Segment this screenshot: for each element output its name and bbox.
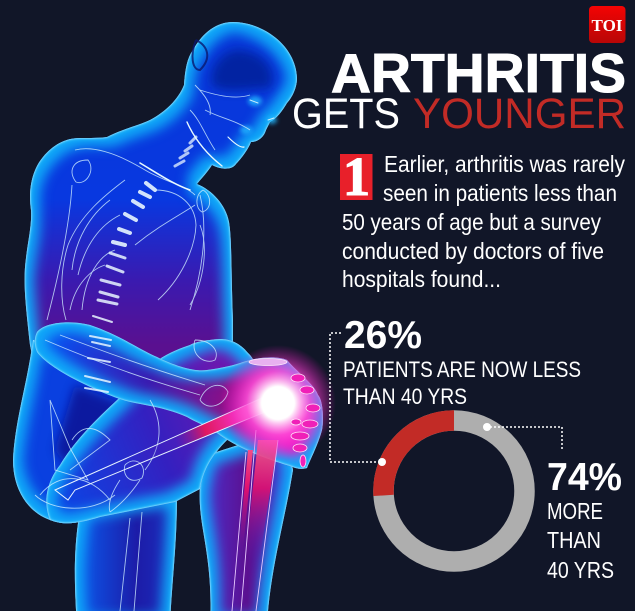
- head shading: [212, 50, 272, 90]
- thigh bone: [55, 398, 265, 500]
- head and torso: [25, 22, 297, 395]
- intro text: hospitals found...: [342, 266, 501, 292]
- donut chart: [383, 420, 524, 562]
- spine: [85, 137, 196, 392]
- title: ARTHRITIS: [331, 42, 626, 104]
- label: 74 percent: MORE: [547, 498, 603, 524]
- jaw and face rim: [140, 100, 274, 190]
- title: GETS: [292, 90, 400, 138]
- number badge: 1: [343, 146, 370, 207]
- knee pain glow: [220, 345, 336, 461]
- label: 26 percent: 26%: [344, 314, 422, 357]
- raised thigh: [46, 339, 262, 523]
- hip: [13, 340, 150, 523]
- shin bones: [232, 430, 278, 611]
- intro text: [342, 151, 625, 292]
- face highlights: [240, 96, 277, 134]
- title: YOUNGER: [413, 90, 626, 138]
- connector: 26 percent: [330, 333, 386, 466]
- TOI logo: TOI: [592, 16, 623, 35]
- connector: 74 percent: [483, 423, 562, 449]
- title: [292, 42, 626, 138]
- TOI logo: [589, 6, 626, 43]
- label: 74 percent: [547, 456, 622, 583]
- fingers: [249, 358, 320, 467]
- label: 74 percent: 74%: [547, 456, 622, 499]
- label: 74 percent: 40 YRS: [547, 557, 614, 583]
- standing leg: [75, 495, 177, 611]
- label: 26 percent: PATIENTS ARE NOW LESS: [343, 357, 581, 382]
- intro text: 50 years of age but a survey: [342, 209, 601, 235]
- label: 26 percent: THAN 40 YRS: [343, 384, 467, 409]
- illustration: human body with glowing knee: [13, 22, 336, 611]
- lower bent leg: [200, 430, 293, 611]
- forearm and hands: [35, 322, 323, 469]
- ribs and shoulder bones: [35, 40, 250, 611]
- segment: 26 percent: [383, 420, 454, 495]
- label: 26 percent: [343, 314, 581, 409]
- pelvis shade: [55, 385, 125, 470]
- tibia: [244, 440, 278, 570]
- label: 74 percent: THAN: [547, 527, 601, 553]
- knee core: [263, 388, 293, 418]
- intro text: seen in patients less than: [383, 180, 617, 206]
- intro text: conducted by doctors of five: [342, 238, 604, 264]
- fibula: [236, 450, 253, 580]
